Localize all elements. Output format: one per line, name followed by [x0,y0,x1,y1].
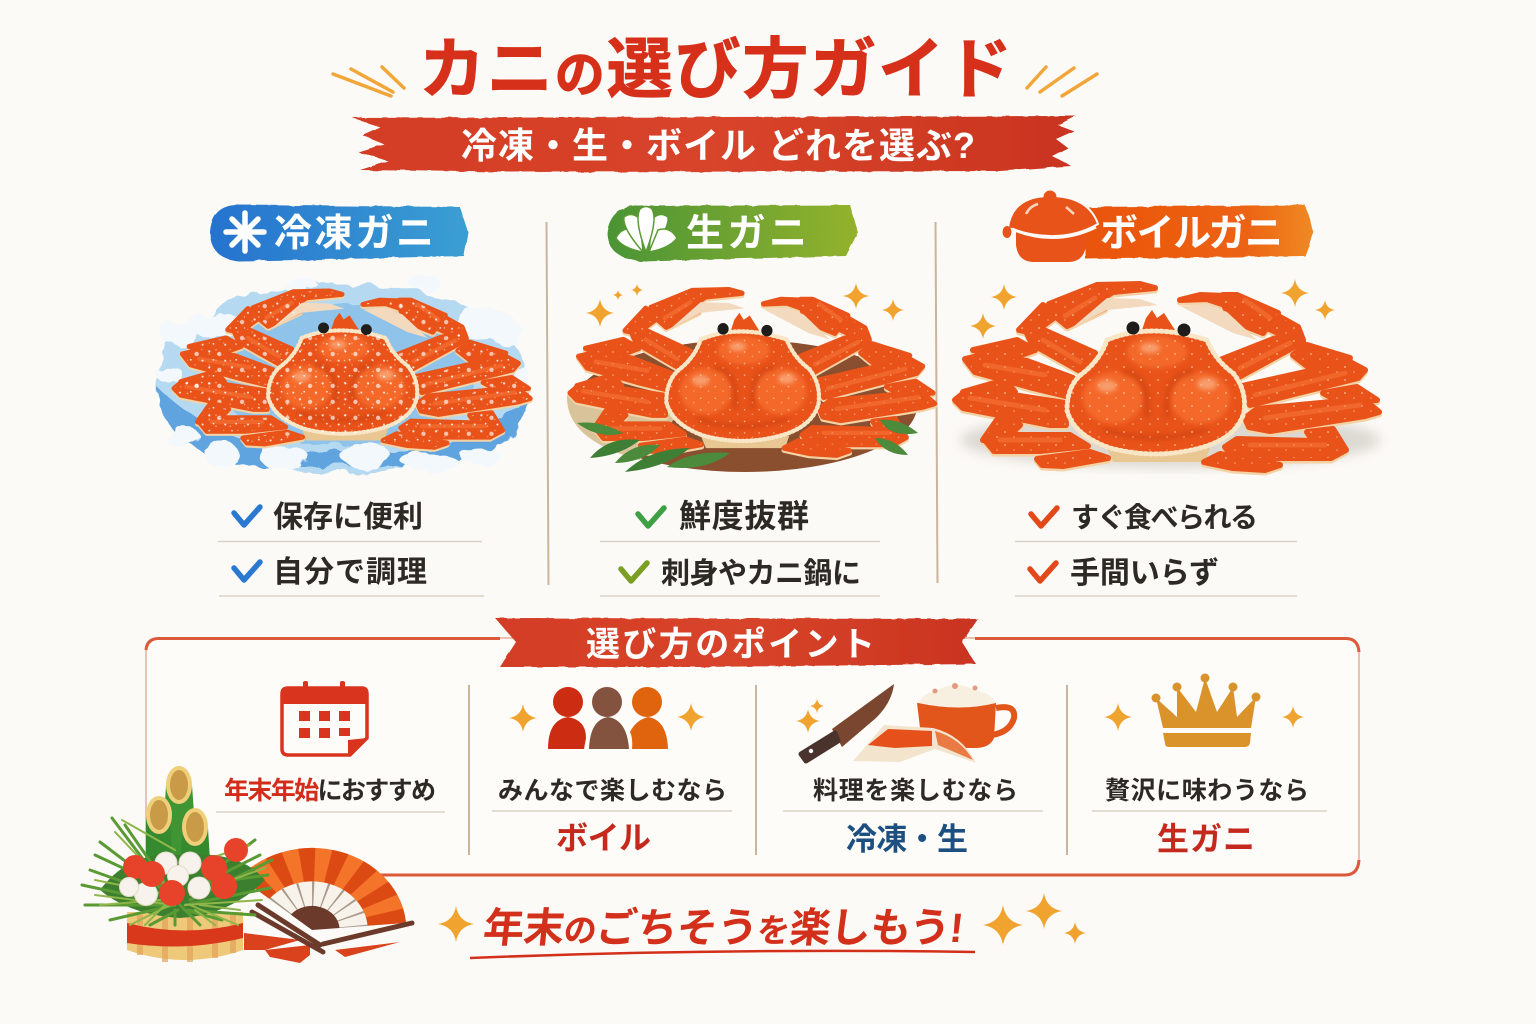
checklist: boiled crab: 手間いらず [1070,557,1219,590]
title accent strokes [333,67,1097,96]
icon: calendar [282,681,367,755]
closing message [438,893,1086,958]
checklist: raw crab: 刺身やカニ鍋に [661,557,861,590]
checklist: raw crab [600,498,880,596]
checklist: frozen crab [218,501,484,596]
checklist: boiled crab: すぐ食べられる [1071,502,1258,533]
label: frozen crab: 冷凍ガニ [274,213,434,255]
checklist: frozen crab: 自分で調理 [273,556,427,589]
panel: boiled crab [955,190,1380,596]
subtitle banner [352,116,1076,172]
base [127,912,243,962]
point: cooking: 冷凍・生 [846,822,968,857]
panel: raw crab [567,205,935,596]
closing message: 年末のごちそうを楽しもう! [481,905,966,951]
illustration: boiled crab [955,279,1380,472]
icon: knife, crab claw and cup [796,683,1014,763]
label: frozen crab [210,205,468,261]
label: boiled crab [1002,190,1314,262]
panel: selection points [146,618,1359,875]
point: cooking [783,683,1043,857]
checklist: raw crab: 鮮度抜群 [679,498,809,534]
point: new year: 年末年始におすすめ [224,777,436,805]
points banner [495,618,978,667]
label: raw crab: 生ガニ [686,213,807,255]
icon: shell [616,206,677,252]
label: raw crab [607,205,858,261]
bamboo tops [148,768,206,844]
icon: people [509,687,705,749]
title: カニの選び方ガイド [419,32,1012,106]
checklist: boiled crab [1015,502,1297,596]
point: cooking: 料理を楽しむなら [813,777,1018,805]
point: new year [216,681,445,812]
icon: pot [1002,190,1098,262]
checklist: frozen crab: 保存に便利 [273,501,423,534]
point: luxury: 生ガニ [1157,821,1255,857]
icon: crown [1104,674,1304,747]
illustration: kadomatsu [82,768,272,962]
label: boiled crab: ボイルガニ [1100,213,1283,255]
illustration: folding fan [244,865,412,963]
point: luxury [1092,674,1327,857]
point: group: みんなで楽しむなら [498,777,727,805]
illustration: crab on plate [567,283,935,472]
illustration: crab on ice [156,276,530,474]
points banner: 選び方のポイント [586,626,875,664]
panel: frozen crab [156,205,530,596]
subtitle banner: 冷凍・生・ボイル どれを選ぶ? [461,125,975,166]
point: luxury: 贅沢に味わうなら [1105,777,1309,805]
point: group [492,687,732,856]
point: group: ボイル [556,820,651,856]
berries [120,838,248,906]
